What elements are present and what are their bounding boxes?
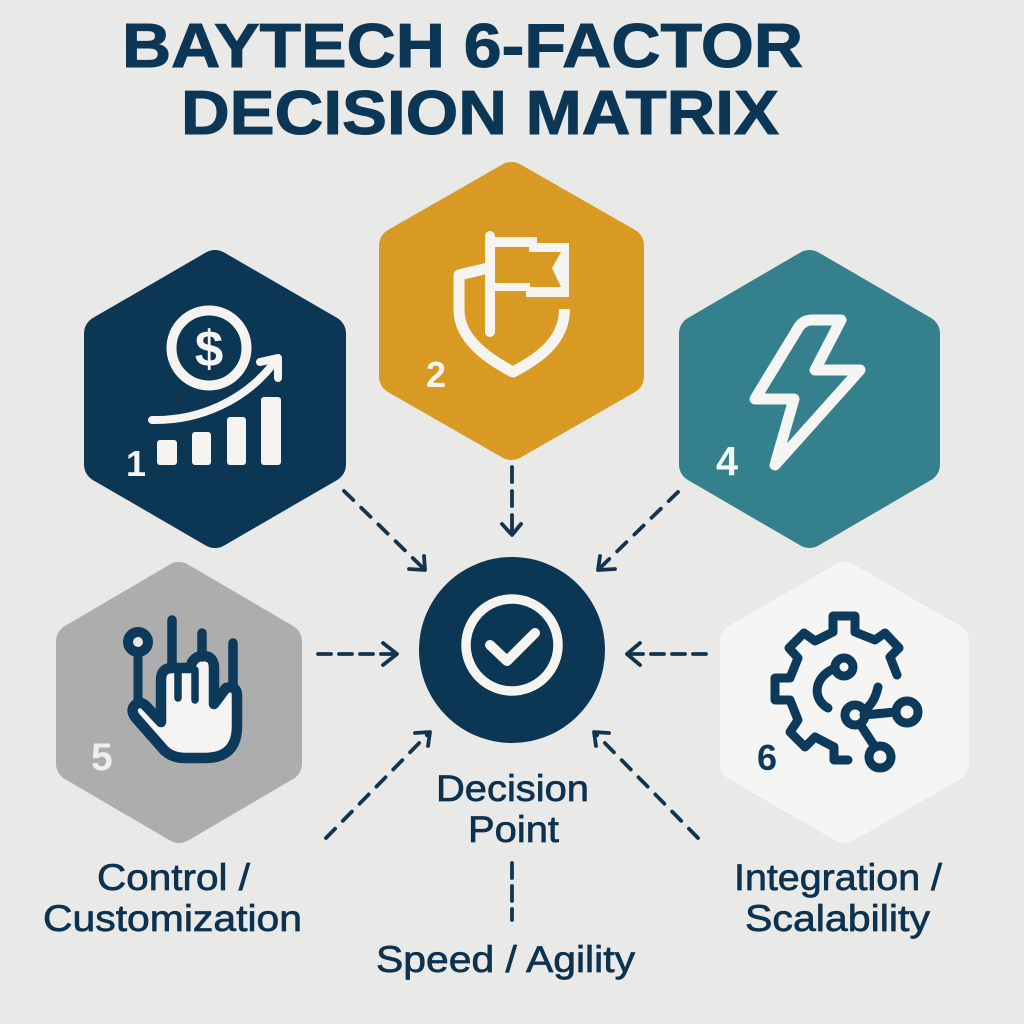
- label: control / customization: [43, 857, 302, 939]
- icon: dollar coin, growth arrow and bars: [152, 310, 281, 465]
- label: speed / agility: Speed / Agility: [376, 939, 636, 980]
- icon: gear with network nodes: [775, 616, 918, 768]
- title: [122, 12, 803, 148]
- number 1: 1: [126, 443, 146, 484]
- arrow: lower right to decision point: [594, 732, 698, 838]
- icon: hand with circuit lines: [128, 620, 237, 758]
- panel: factor 6 integration hexagon: [738, 580, 951, 825]
- title: DECISION MATRIX: [181, 79, 779, 148]
- label: integration / scalability: [734, 857, 943, 939]
- panel: factor 2 risk hexagon: [397, 180, 626, 442]
- icon: shield with flag: [459, 236, 569, 372]
- number 2: 2: [426, 354, 446, 395]
- label: integration / scalability: Scalability: [745, 898, 931, 939]
- arrow: factor 4 to decision point: [598, 492, 678, 570]
- panel: factor 1 cost hexagon: [102, 268, 328, 530]
- arrow: factor 5 to decision point: [318, 643, 397, 665]
- icon: dollar coin, growth arrow and bars: $: [195, 320, 223, 377]
- arrow: factor 2 to decision point: [502, 467, 521, 535]
- connector: speed label to decision point: [510, 863, 514, 920]
- label: control / customization: Customization: [43, 898, 302, 939]
- number 6: 6: [757, 737, 777, 778]
- label: decision point: [436, 768, 589, 850]
- panel: factor 5 control hexagon: [74, 580, 284, 825]
- title: BAYTECH 6-FACTOR: [122, 12, 803, 81]
- panel: factor 4 speed hexagon: [697, 268, 922, 530]
- number 4: 4: [716, 438, 738, 484]
- icon: lightning bolt: [755, 320, 860, 465]
- label: decision point: Point: [468, 809, 560, 850]
- number 5: 5: [91, 736, 113, 779]
- label: control / customization: Control /: [97, 857, 251, 898]
- decision point circle with check icon: [419, 557, 605, 743]
- label: decision point: Decision: [436, 768, 589, 809]
- arrow: factor 6 to decision point: [627, 643, 706, 665]
- arrow: lower left to decision point: [326, 732, 430, 838]
- arrow: factor 1 to decision point: [344, 491, 425, 570]
- label: integration / scalability: Integration /: [734, 857, 943, 898]
